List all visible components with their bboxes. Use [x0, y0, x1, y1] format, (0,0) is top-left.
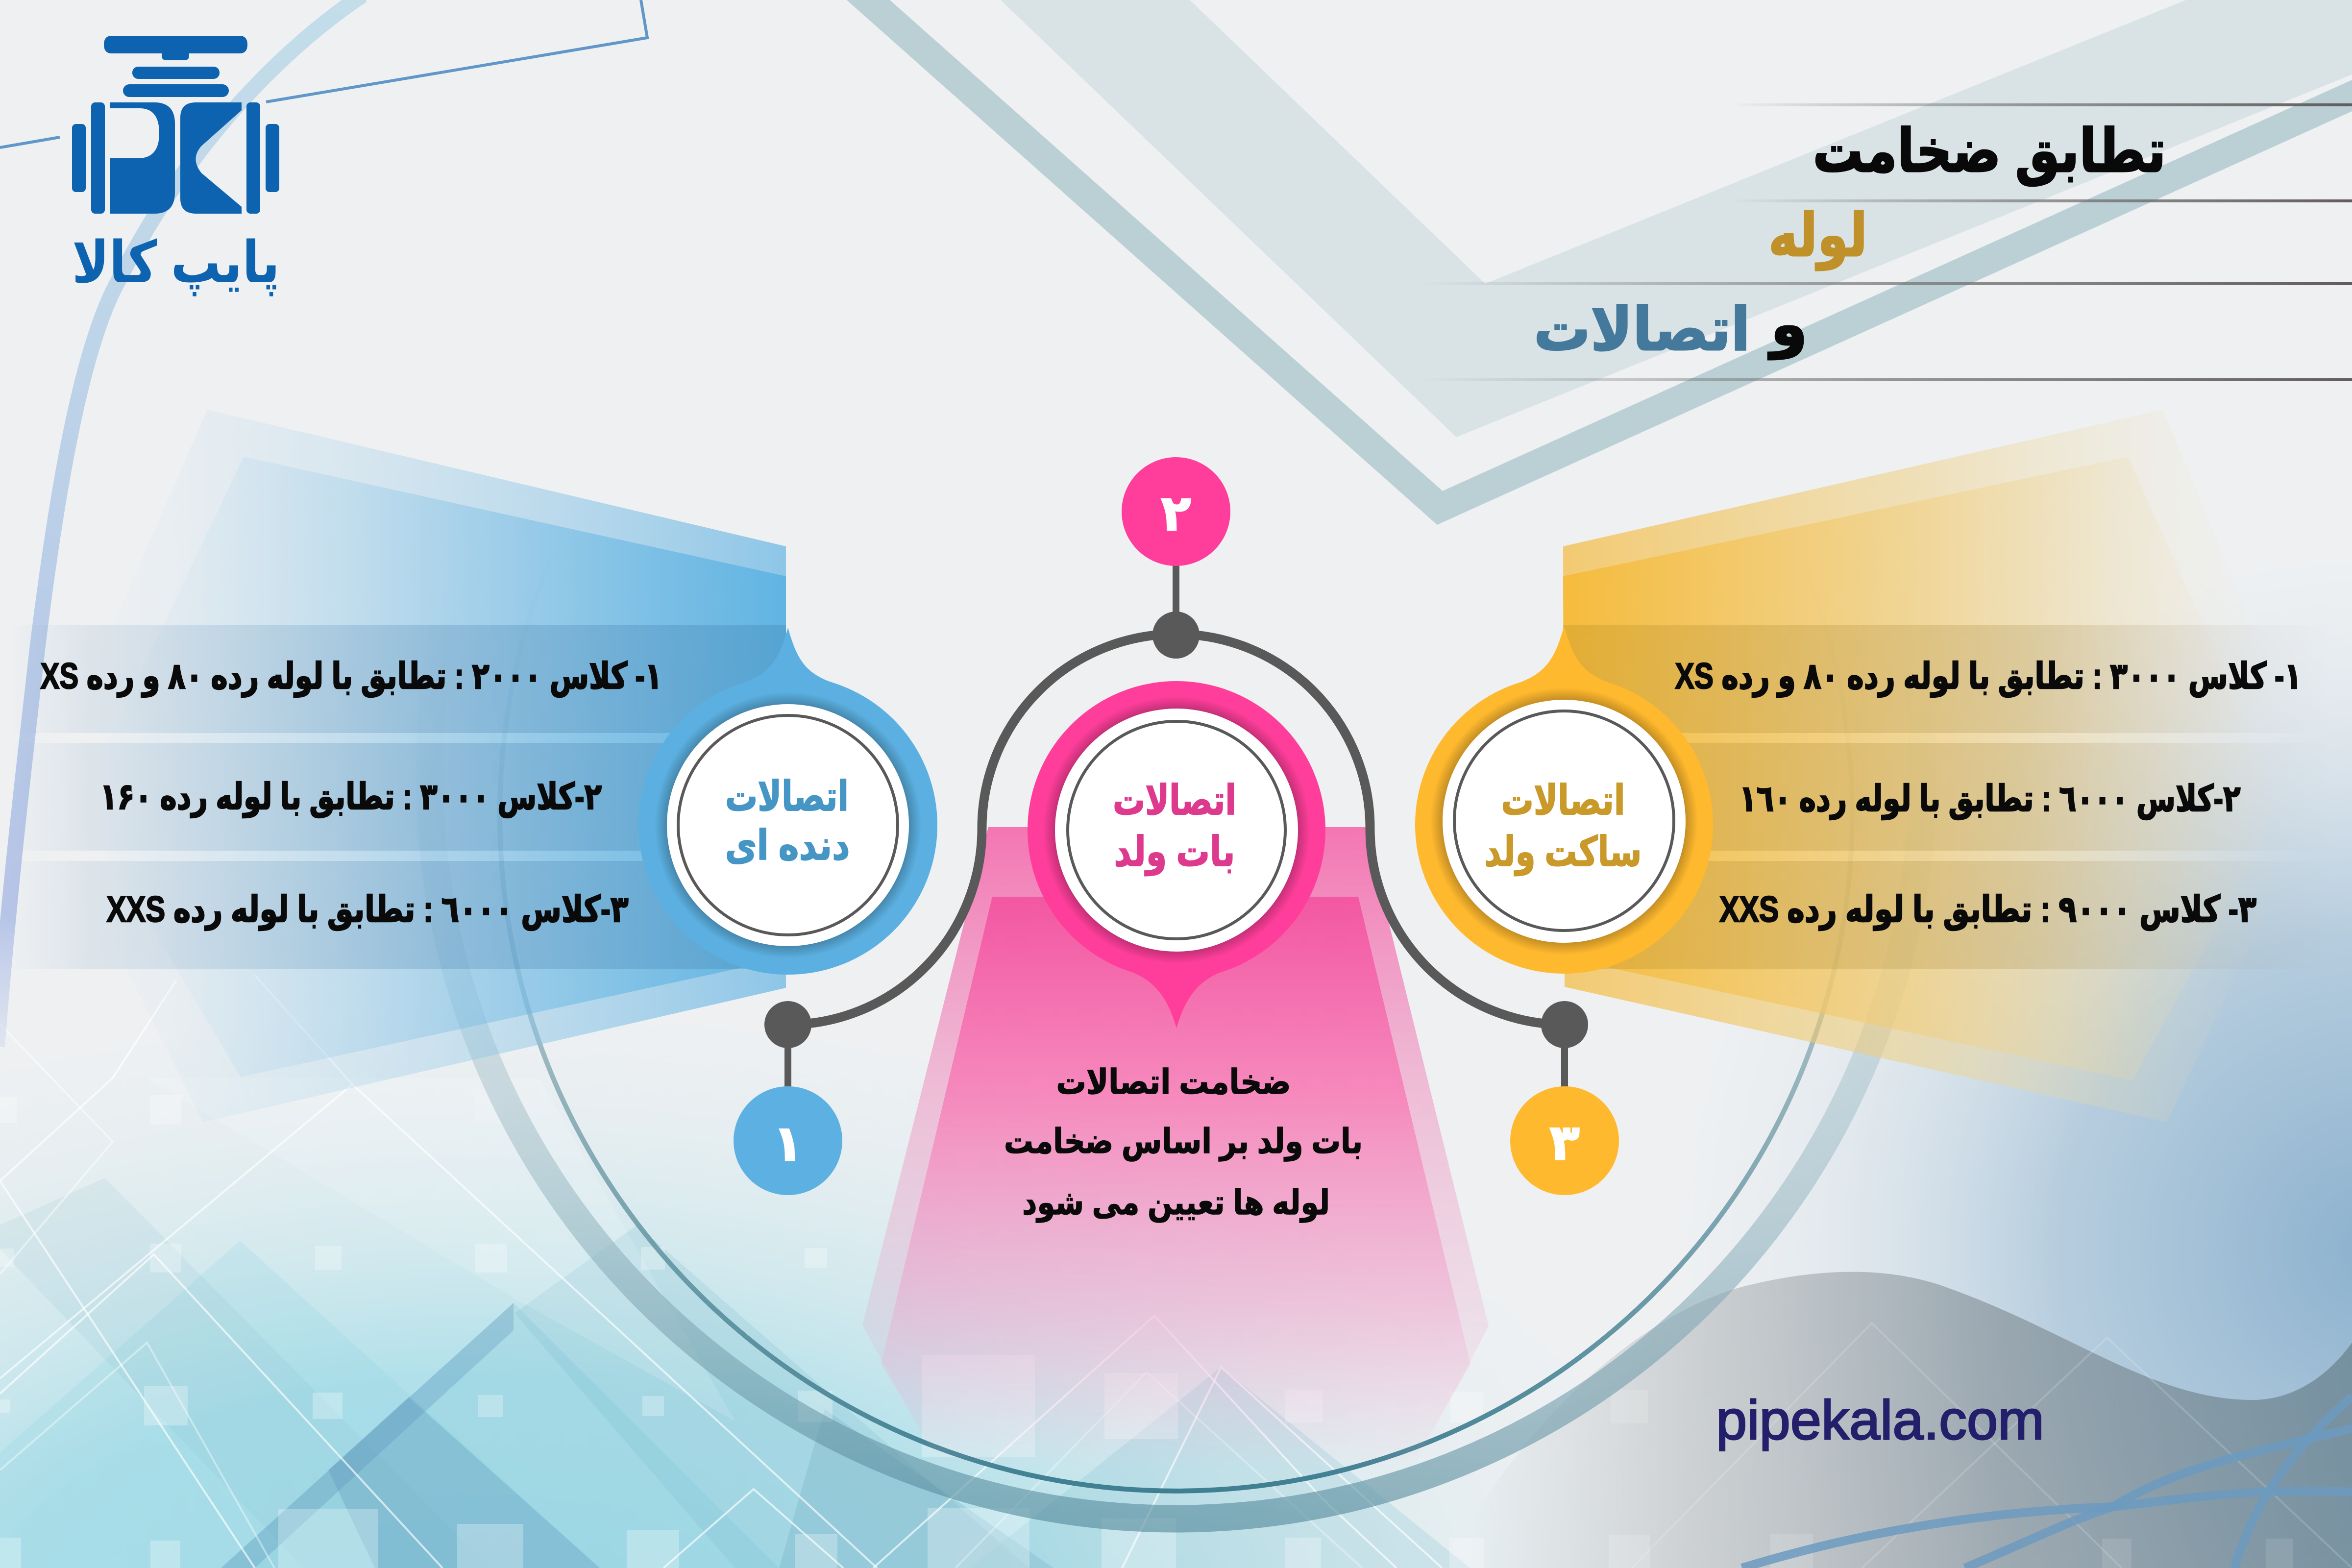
drop: butt weld — [1028, 681, 1325, 1028]
background: thin ring — [500, 539, 1852, 1491]
website address: pipekala.com — [1716, 1389, 2044, 1451]
logo: wordmark: پایپ کالا — [72, 230, 280, 296]
connector nodes — [764, 612, 1588, 1048]
logo: stem bars — [123, 67, 229, 97]
logo — [72, 36, 280, 296]
text: threaded class list: ۱- کلاس ۲۰۰۰ : تطابق با لوله رده ۸۰ و رده XS — [40, 656, 662, 698]
text: socket weld class list: ۱- کلاس ۳۰۰۰ : تطابق با لوله رده ۸۰ و رده XS — [1675, 656, 2302, 698]
pink panel inner trapezoid — [881, 897, 1470, 1568]
blue panel outer shape — [39, 410, 786, 1122]
label: butt weld — [1113, 777, 1236, 876]
label: butt weld: بات ولد — [1114, 829, 1235, 876]
title: pipe word: لوله — [1768, 202, 1867, 270]
pink panel outer trapezoid — [862, 827, 1489, 1568]
decorative blue outline, top left — [0, 0, 647, 147]
blue panel inner shape — [78, 457, 786, 1077]
title: fittings word: اتصالات — [1534, 296, 1750, 363]
text: socket weld class list — [1675, 656, 2302, 931]
logo: letter K — [180, 102, 242, 214]
label: threaded — [725, 773, 850, 868]
text: butt weld description — [1004, 1063, 1363, 1223]
label: socket weld — [1485, 777, 1642, 876]
background: darker chevron strip — [847, 0, 2352, 525]
yellow panel outer shape — [1563, 410, 2323, 1122]
background: pale rectangles — [0, 1094, 2293, 1568]
connector stems — [784, 564, 1568, 1091]
panel: butt weld fittings (pink) — [862, 827, 1489, 1568]
yellow panel inner shape — [1563, 457, 2283, 1080]
badge 3: ۳ — [1549, 1115, 1580, 1170]
grey connector curve — [788, 634, 1565, 1025]
background: teal lower-left wash — [0, 1004, 1715, 1568]
text: butt weld description: ضخامت اتصالات — [1056, 1063, 1291, 1101]
title: and: و — [1768, 291, 1808, 360]
logo: valve handle — [104, 36, 247, 60]
badge 2: ۲ — [1161, 486, 1191, 541]
text: threaded class list — [40, 656, 662, 931]
text: socket weld class list: ۲-کلاس ٦۰۰۰ : تطابق با لوله رده ١٦۰ — [1739, 778, 2240, 820]
logo: letter P — [110, 102, 175, 214]
text: butt weld description: بات ولد بر اساس ضخامت — [1004, 1122, 1363, 1161]
label: butt weld: اتصالات — [1113, 777, 1236, 823]
yellow row bands — [1563, 625, 2337, 969]
blue row bands — [10, 625, 786, 969]
badge 2 — [1122, 457, 1230, 566]
title: main heading — [1534, 118, 2166, 363]
panel: threaded fittings (blue) — [10, 410, 786, 1122]
panel: socket weld fittings (yellow) — [1563, 410, 2337, 1122]
text: threaded class list: ۲-کلاس ۳۰۰۰ : تطابق با لوله رده ۱۶۰ — [100, 776, 602, 818]
label: socket weld: ساکت ولد — [1485, 829, 1642, 876]
background: blue lines lower right — [1742, 1396, 2352, 1568]
logo: right flanges — [246, 102, 279, 214]
badge 1 — [734, 1086, 842, 1195]
title rule lines — [1421, 103, 2352, 381]
drop: threaded — [638, 628, 937, 975]
background: grey wave — [1446, 1272, 2352, 1568]
background: left light-blue arc — [0, 0, 363, 1047]
badge 1: ۱ — [773, 1116, 803, 1171]
text: threaded class list: ۳-کلاس ٦۰۰۰ : تطابق با لوله رده XXS — [107, 889, 628, 931]
badge 3 — [1510, 1086, 1619, 1195]
label: threaded: دنده ای — [725, 822, 850, 868]
background: pale chevron band — [1001, 0, 2352, 437]
text: butt weld description: لوله ها تعیین می شود — [1022, 1183, 1330, 1223]
background: thin white lattice lines — [0, 975, 2352, 1568]
text: socket weld class list: ۳- کلاس ۹۰۰۰ : تطابق با لوله رده XXS — [1719, 889, 2256, 931]
background: large faint ring band — [429, 588, 1923, 1519]
background: blue lower-right wash — [1666, 539, 2352, 1568]
drop: socket weld — [1415, 626, 1713, 974]
label: threaded: اتصالات — [725, 773, 849, 819]
title: main heading: تطابق ضخامت — [1813, 118, 2166, 186]
logo: left flanges — [72, 102, 105, 214]
label: socket weld: اتصالات — [1501, 777, 1625, 823]
background: diagonal tinted shards — [0, 1078, 1470, 1568]
